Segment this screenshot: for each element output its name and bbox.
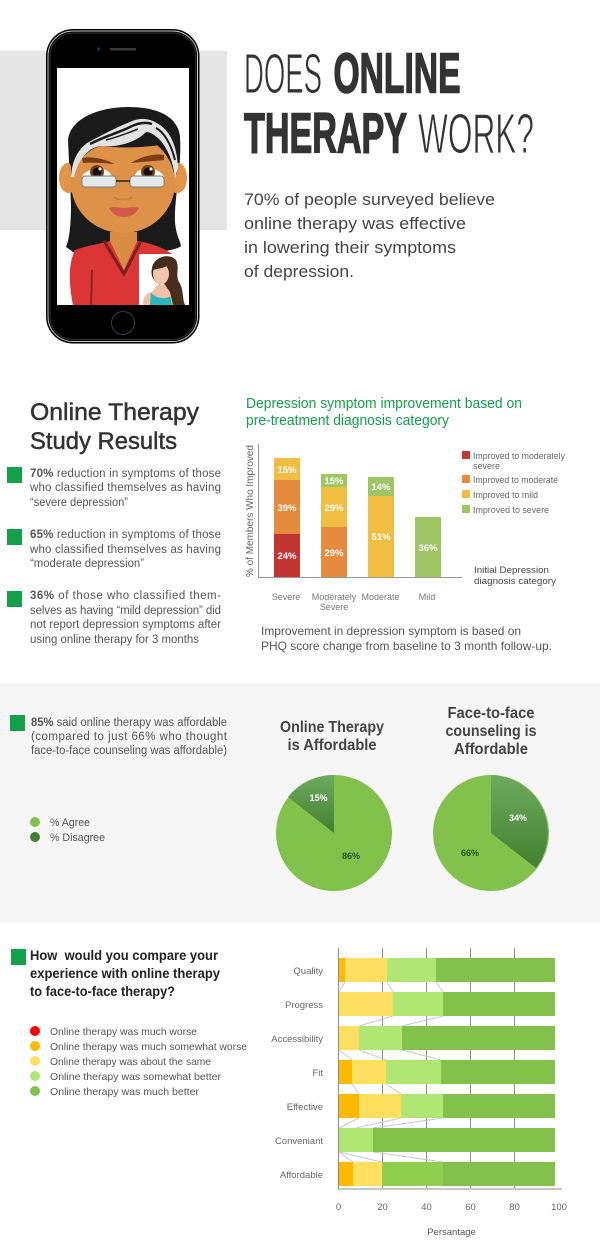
panel: study results	[7, 399, 221, 646]
result: severe depression: who classified themselves as having	[29, 482, 221, 494]
chart legend: severe	[473, 461, 500, 471]
stacked bar chart: depression improvement: Severe	[272, 592, 300, 602]
stacked bar chart: depression improvement: 39%	[277, 503, 297, 514]
stacked bar chart: comparison: Accessibility	[271, 1034, 323, 1045]
question heading	[11, 948, 220, 999]
stacked bar chart: comparison: 80	[509, 1202, 520, 1213]
stacked bar chart: depression improvement: % of Members Who Improved	[244, 445, 256, 577]
heading: depression chart	[246, 396, 522, 429]
icon: smartphone with video call	[46, 29, 200, 344]
heading: depression chart: Depression symptom improvement based on	[246, 396, 522, 412]
affordability statement: face-to-face counseling was affordable)	[31, 745, 227, 757]
pie chart: online therapy: 15%	[309, 793, 328, 803]
stacked bar chart: depression improvement: 15%	[324, 476, 344, 487]
result: moderate depression: who classified themselves as having	[29, 544, 221, 556]
stacked bar chart: depression improvement	[244, 444, 462, 612]
stacked bar chart: depression improvement: 36%	[418, 543, 438, 554]
stacked bar chart: depression improvement: 24%	[277, 551, 297, 562]
chart legend: Improved to moderately	[473, 451, 565, 461]
stacked bar chart: depression improvement: Moderately	[312, 592, 357, 602]
result: mild depression: using online therapy for 3 months	[30, 634, 199, 646]
pie legend: % Disagree	[50, 832, 105, 844]
result: mild depression	[7, 590, 221, 646]
heading: depression chart: pre-treatment diagnosis category	[246, 413, 450, 429]
title: ONLINE	[334, 42, 460, 106]
illustration: counselor on screen	[59, 107, 189, 305]
stacked bar chart: comparison: Fit	[312, 1068, 323, 1079]
chart legend	[462, 451, 565, 515]
result: mild depression: 36% of those who classified them-	[30, 590, 221, 602]
panel: comparison question	[11, 948, 567, 1238]
stacked bar chart: depression improvement: 29%	[324, 548, 344, 559]
stacked bar chart: comparison: Conveniant	[275, 1136, 323, 1147]
axis caption: Initial Depression	[474, 565, 549, 576]
stacked bar chart: comparison: 0	[336, 1202, 341, 1213]
comparison legend: Online therapy was about the same	[50, 1056, 211, 1068]
chart note: PHQ score change from baseline to 3 month follow-up.	[261, 639, 552, 653]
chart legend: Improved to mild	[473, 490, 538, 500]
stacked bar chart: depression improvement: Moderate	[361, 592, 400, 602]
affordability statement	[10, 715, 228, 757]
chart note: Improvement in depression symptom is based on	[261, 624, 521, 638]
question heading: to face-to-face therapy?	[30, 984, 175, 999]
result: mild depression: selves as having “mild depression” did	[30, 605, 221, 617]
pie chart: face-to-face	[433, 775, 549, 891]
affordability statement: 85% said online therapy was affordable	[31, 717, 227, 729]
pie legend: % Agree	[50, 817, 90, 829]
comparison legend: Online therapy was much better	[50, 1086, 199, 1098]
stacked bar chart: depression improvement: 14%	[371, 482, 391, 493]
title	[244, 42, 534, 166]
heading: face-to-face pie: Face-to-face	[448, 705, 535, 722]
axis caption	[474, 565, 556, 587]
axis caption: diagnosis category	[474, 576, 556, 587]
chart legend: Improved to severe	[473, 505, 549, 515]
heading: face-to-face pie: counseling is	[446, 723, 536, 740]
question heading: experience with online therapy	[30, 966, 220, 981]
result: severe depression: 70% reduction in symptoms of those	[30, 468, 221, 480]
result: moderate depression	[7, 529, 221, 570]
title: THERAPY	[244, 102, 407, 166]
pie legend	[30, 817, 105, 844]
stacked bar chart: depression improvement: Mild	[419, 592, 435, 602]
stacked bar chart: comparison: 60	[465, 1202, 476, 1213]
affordability statement: (compared to just 66% who thought	[31, 731, 228, 743]
intro text: 70% of people surveyed believe	[244, 190, 495, 209]
comparison legend	[30, 1026, 247, 1098]
pie chart: online therapy: 86%	[342, 851, 360, 861]
chart note	[261, 624, 552, 653]
heading: online therapy pie: is Affordable	[288, 737, 377, 754]
intro text: online therapy was effective	[244, 214, 466, 233]
background band behind phone	[0, 51, 227, 230]
title: DOES	[244, 42, 322, 106]
stacked bar chart: comparison: Affordable	[280, 1170, 323, 1181]
result: mild depression: not report depression symptoms after	[30, 619, 221, 631]
illustration: client inset	[139, 254, 189, 305]
panel: affordability	[0, 683, 600, 923]
pie chart: face-to-face: 34%	[509, 813, 527, 823]
stacked bar chart: comparison: 20	[377, 1202, 388, 1213]
comparison legend: Online therapy was much somewhat worse	[50, 1041, 247, 1053]
comparison legend: Online therapy was much worse	[50, 1026, 197, 1038]
stacked bar chart: comparison: Effective	[287, 1102, 323, 1113]
intro text	[244, 190, 495, 281]
chart legend: Improved to moderate	[473, 475, 558, 485]
result: moderate depression: “moderate depression”	[30, 558, 144, 570]
stacked bar chart: comparison: Persantage	[427, 1227, 476, 1238]
heading: online therapy pie	[280, 719, 384, 754]
stacked bar chart: comparison: Progress	[285, 1000, 323, 1011]
heading: study results	[30, 399, 199, 455]
heading: face-to-face pie: Affordable	[454, 741, 528, 758]
stacked bar chart: comparison: 100	[551, 1202, 567, 1213]
result: severe depression	[7, 467, 221, 509]
heading: online therapy pie: Online Therapy	[280, 719, 384, 736]
result: severe depression: “severe depression”	[30, 497, 128, 509]
comparison legend: Online therapy was somewhat better	[50, 1071, 222, 1083]
stacked bar chart: comparison: 40	[421, 1202, 432, 1213]
pie chart: online therapy	[276, 775, 392, 891]
question heading: How would you compare your	[30, 948, 219, 963]
pie chart: face-to-face: 66%	[461, 848, 479, 858]
stacked bar chart: depression improvement: 15%	[277, 465, 297, 476]
stacked bar chart: comparison: Quality	[293, 966, 323, 977]
intro text: in lowering their symptoms	[244, 238, 456, 257]
heading: study results: Online Therapy	[30, 399, 199, 426]
result: moderate depression: 65% reduction in symptoms of those	[30, 529, 221, 541]
stacked bar chart: comparison	[271, 948, 567, 1238]
stacked bar chart: depression improvement: Severe	[320, 602, 348, 612]
stacked bar chart: depression improvement: 29%	[324, 503, 344, 514]
heading: study results: Study Results	[30, 428, 177, 455]
heading: face-to-face pie	[446, 705, 536, 758]
stacked bar chart: depression improvement: 51%	[371, 532, 391, 543]
intro text: of depression.	[244, 262, 354, 281]
